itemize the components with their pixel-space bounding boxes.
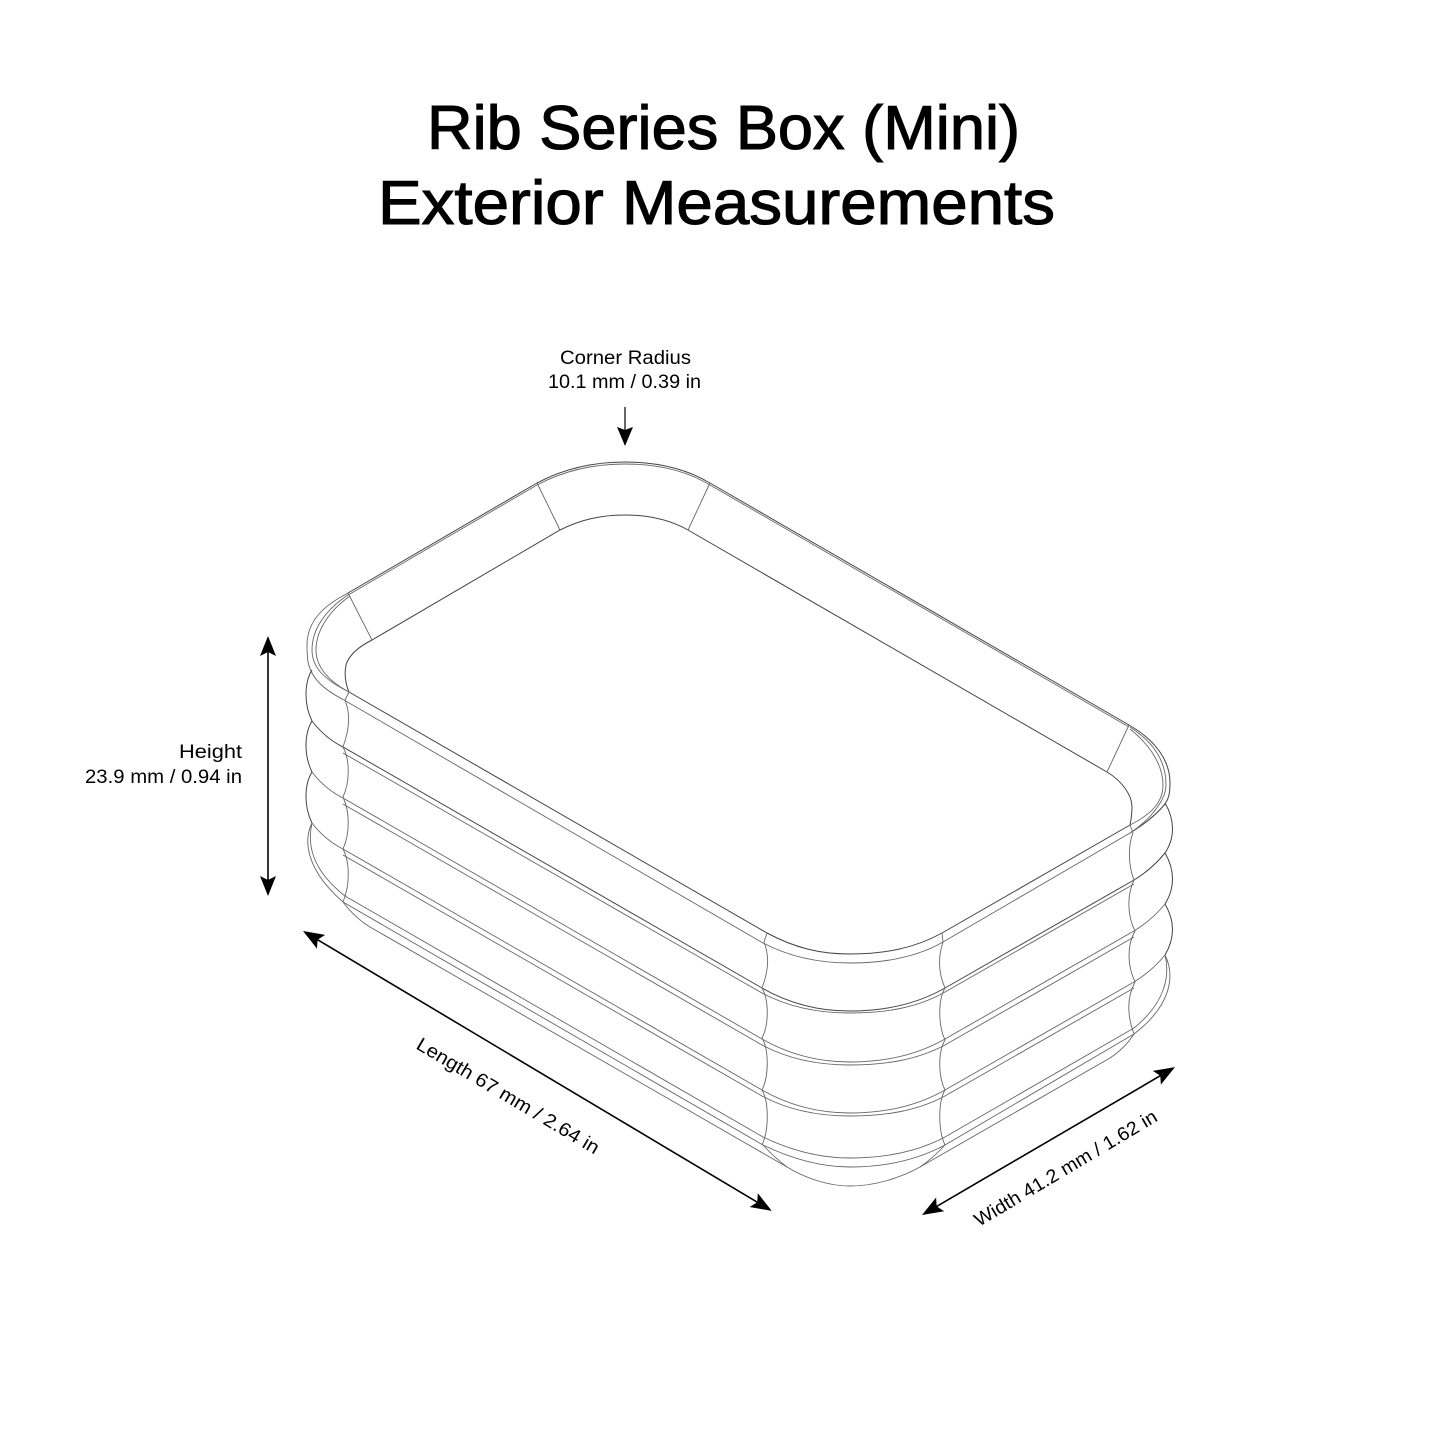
bottom edge lines <box>343 896 1134 1186</box>
box rim and tray top <box>307 462 1170 833</box>
corner radius label: Corner Radius <box>560 348 691 369</box>
height label: Height <box>179 742 243 763</box>
box drawing <box>306 462 1172 1186</box>
title <box>378 94 1055 238</box>
height label: 23.9 mm / 0.94 in <box>85 767 242 788</box>
width label: Width 41.2 mm / 1.62 in <box>971 1107 1161 1231</box>
rib corner waves <box>343 692 1135 1145</box>
arrow: height <box>260 636 276 896</box>
height label <box>85 742 243 788</box>
arrow: length <box>299 924 776 1218</box>
right outer rib profile <box>1134 803 1172 1034</box>
left outer rib profile <box>306 670 345 902</box>
corner radius label <box>548 348 701 393</box>
corner radius label: 10.1 mm / 0.39 in <box>548 372 701 393</box>
title: Exterior Measurements <box>378 169 1055 238</box>
length label: Length 67 mm / 2.64 in <box>412 1034 603 1159</box>
rib seam 3 <box>312 823 1165 1116</box>
rib seam 1 <box>312 721 1165 1013</box>
arrow: width <box>918 1060 1179 1222</box>
title: Rib Series Box (Mini) <box>427 94 1020 163</box>
arrow: corner radius <box>617 407 633 446</box>
rib seam 2 <box>312 772 1165 1065</box>
top rib edge <box>344 692 1130 963</box>
